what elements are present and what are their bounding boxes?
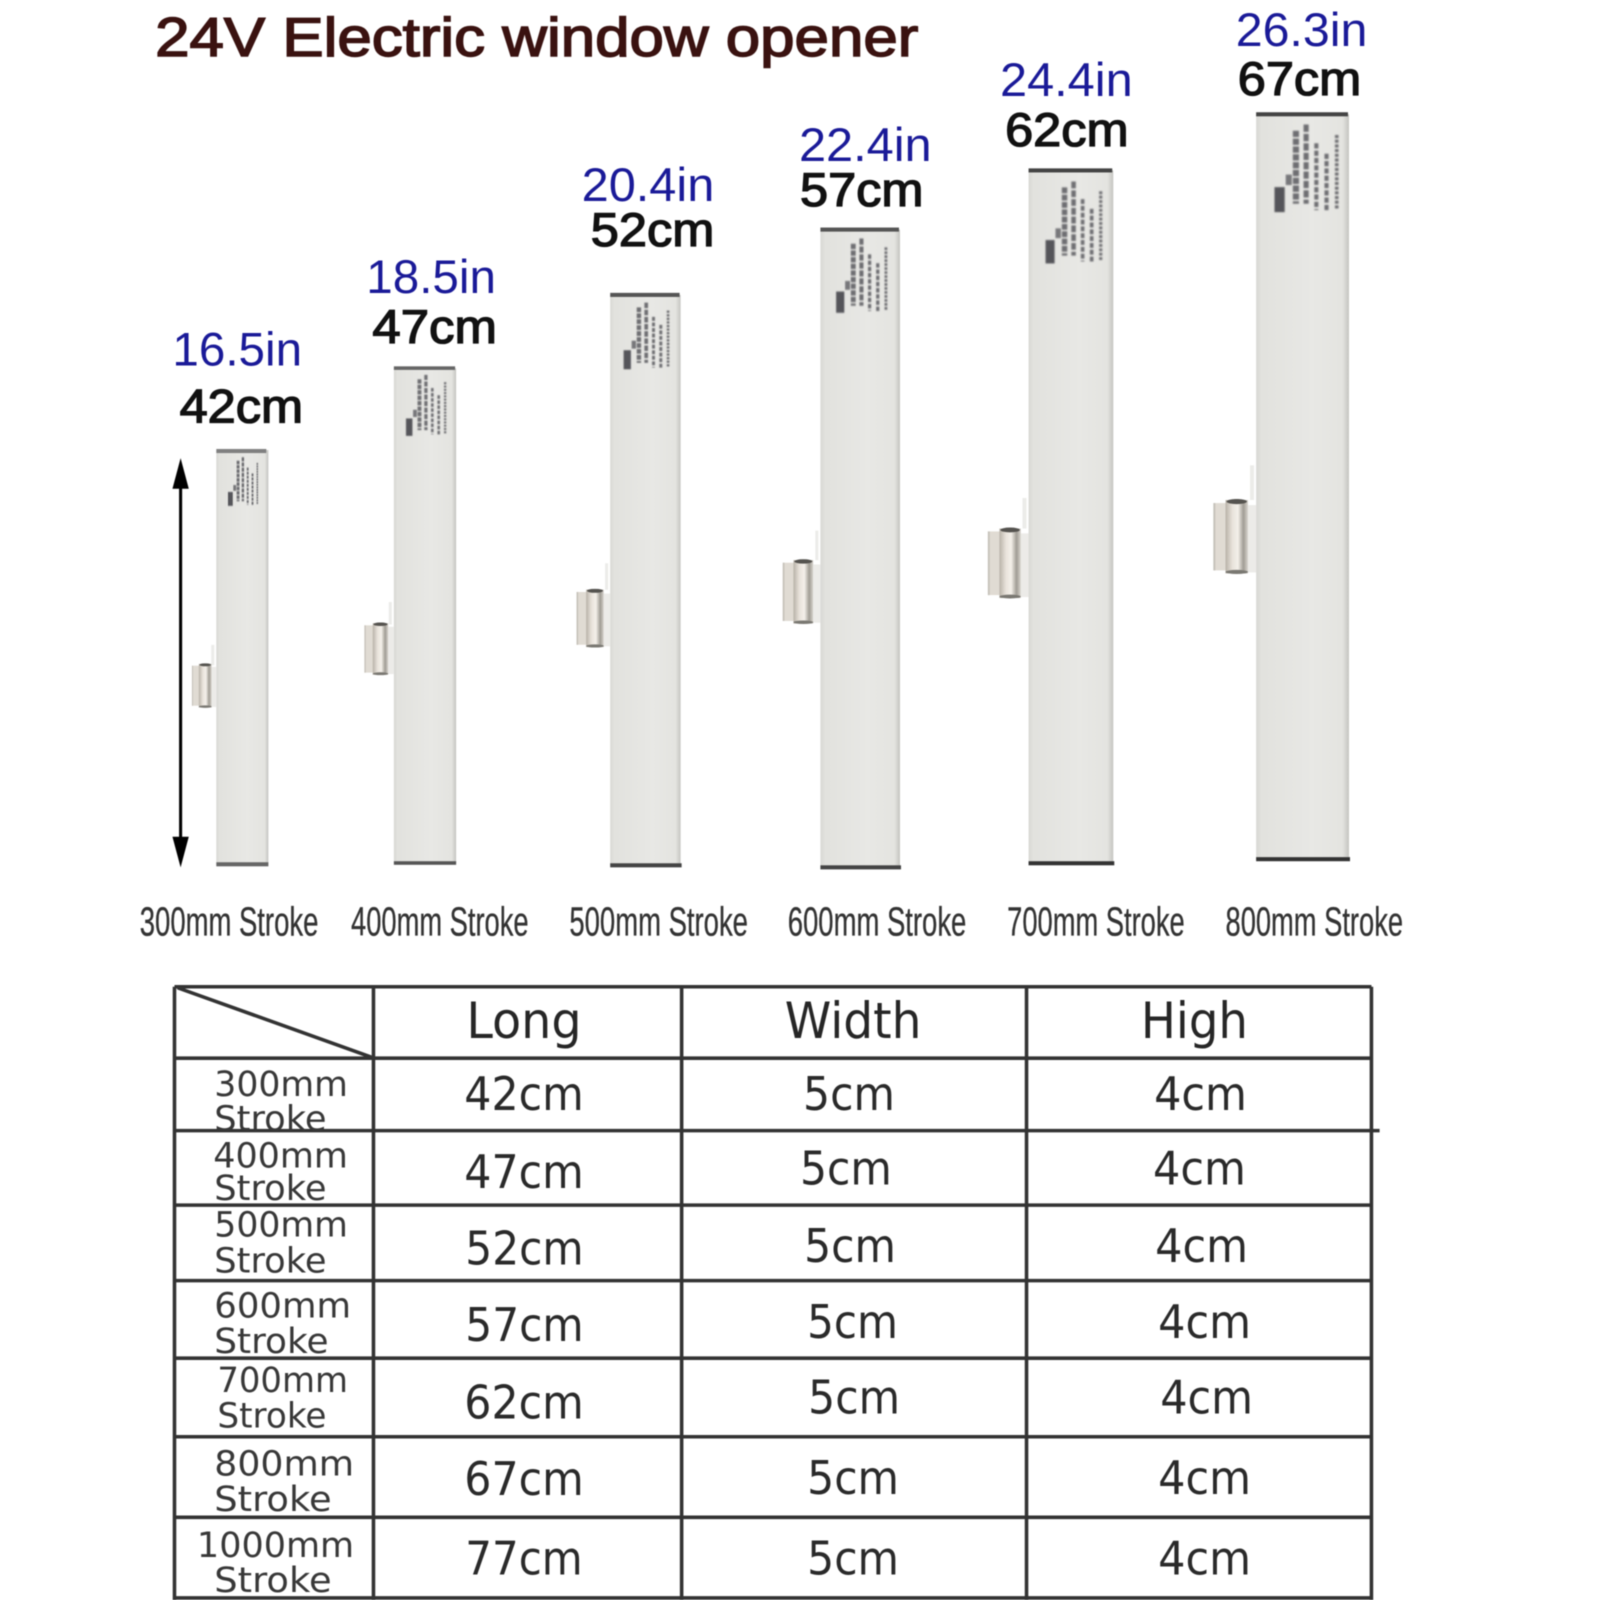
length label: 42cm: 16.5in: [172, 323, 302, 375]
stroke captions: 500mm Stroke: [569, 899, 748, 945]
row: 300mm stroke: 42cm: [464, 1067, 584, 1121]
row: 400mm stroke: [213, 1136, 1246, 1209]
length label: 42cm: [172, 323, 303, 432]
row: 800mm stroke: 67cm: [464, 1452, 584, 1506]
row: 400mm stroke: 400mm: [213, 1136, 348, 1176]
actuator: 300mm stroke: [192, 449, 268, 866]
table header: High: [1141, 992, 1248, 1050]
table header: Long: [466, 992, 582, 1050]
height arrow: [172, 458, 189, 867]
length label: 67cm: [1236, 4, 1367, 105]
row: 800mm stroke: 4cm: [1158, 1451, 1251, 1505]
length label: 47cm: 18.5in: [366, 251, 496, 303]
row: 1000mm stroke: 77cm: [465, 1531, 583, 1585]
row: 500mm stroke: 52cm: [465, 1221, 584, 1275]
row: 1000mm stroke: Stroke: [214, 1561, 332, 1600]
length label: 57cm: 57cm: [800, 164, 923, 216]
actuator: 600mm stroke: [783, 228, 901, 869]
panel: actuator size comparison: [140, 4, 1403, 945]
stroke captions: 700mm Stroke: [1007, 899, 1185, 945]
row: 700mm stroke: [217, 1361, 1253, 1437]
row: 300mm stroke: 300mm: [214, 1065, 348, 1105]
length label: 57cm: 22.4in: [799, 119, 932, 171]
stroke captions: 400mm Stroke: [351, 899, 529, 945]
length label: 67cm: 26.3in: [1236, 4, 1367, 56]
row: 700mm stroke: 5cm: [808, 1370, 900, 1424]
length label: 47cm: [366, 251, 497, 353]
stroke captions: 600mm Stroke: [788, 899, 966, 945]
length label: 42cm: 42cm: [180, 380, 303, 432]
length label: 52cm: 52cm: [591, 204, 714, 256]
row: 700mm stroke: 700mm: [217, 1361, 348, 1401]
row: 500mm stroke: 500mm: [214, 1206, 348, 1246]
dimensions table: [174, 987, 1380, 1600]
row: 300mm stroke: 5cm: [803, 1067, 895, 1121]
title: 24V Electric window opener: [155, 6, 918, 68]
row: 400mm stroke: 4cm: [1153, 1142, 1246, 1196]
row: 500mm stroke: 5cm: [804, 1219, 896, 1273]
row: 300mm stroke: [214, 1065, 1247, 1140]
row: 300mm stroke: Stroke: [214, 1100, 327, 1140]
row: 600mm stroke: 600mm: [214, 1286, 351, 1326]
length label: 52cm: 20.4in: [582, 159, 714, 211]
actuator: 700mm stroke: [988, 168, 1114, 865]
actuator: 400mm stroke: [364, 366, 456, 865]
row: 400mm stroke: 47cm: [464, 1145, 584, 1199]
row: 1000mm stroke: 4cm: [1158, 1531, 1251, 1585]
length label: 57cm: [799, 119, 932, 216]
row: 700mm stroke: 4cm: [1160, 1370, 1253, 1424]
row: 800mm stroke: 800mm: [214, 1445, 354, 1485]
row: 800mm stroke: [214, 1445, 1251, 1520]
row: 700mm stroke: 62cm: [464, 1375, 584, 1429]
row: 700mm stroke: Stroke: [217, 1397, 327, 1437]
length label: 62cm: [1000, 54, 1133, 156]
row: 1000mm stroke: [197, 1526, 1251, 1600]
row: 600mm stroke: [214, 1286, 1251, 1362]
length label: 62cm: 24.4in: [1000, 54, 1133, 106]
row: 800mm stroke: 5cm: [807, 1451, 899, 1505]
table grid: [174, 987, 1380, 1600]
actuator: 800mm stroke: [1213, 112, 1350, 861]
row: 500mm stroke: [214, 1206, 1248, 1281]
row: 400mm stroke: 5cm: [800, 1142, 892, 1196]
table header: [466, 992, 1248, 1050]
length label: 67cm: 67cm: [1238, 53, 1361, 105]
row: 1000mm stroke: 5cm: [807, 1531, 899, 1585]
length label: 47cm: 47cm: [372, 301, 497, 353]
row: 300mm stroke: 4cm: [1154, 1067, 1247, 1121]
stroke captions: 300mm Stroke: [140, 899, 318, 945]
stroke captions: [140, 899, 1403, 945]
row: 800mm stroke: Stroke: [214, 1480, 332, 1520]
row: 1000mm stroke: 1000mm: [197, 1526, 354, 1566]
length label: 62cm: 62cm: [1005, 104, 1129, 156]
stroke captions: 800mm Stroke: [1226, 899, 1403, 945]
row: 600mm stroke: 5cm: [807, 1295, 898, 1349]
table header: Width: [785, 992, 921, 1050]
row: 500mm stroke: Stroke: [214, 1241, 327, 1281]
row: 600mm stroke: Stroke: [214, 1322, 329, 1362]
actuator: 500mm stroke: [577, 293, 682, 867]
row: 400mm stroke: Stroke: [214, 1169, 327, 1209]
row: 600mm stroke: 57cm: [465, 1298, 584, 1352]
row: 600mm stroke: 4cm: [1158, 1295, 1251, 1349]
row: 500mm stroke: 4cm: [1155, 1219, 1248, 1273]
length label: 52cm: [582, 159, 714, 256]
